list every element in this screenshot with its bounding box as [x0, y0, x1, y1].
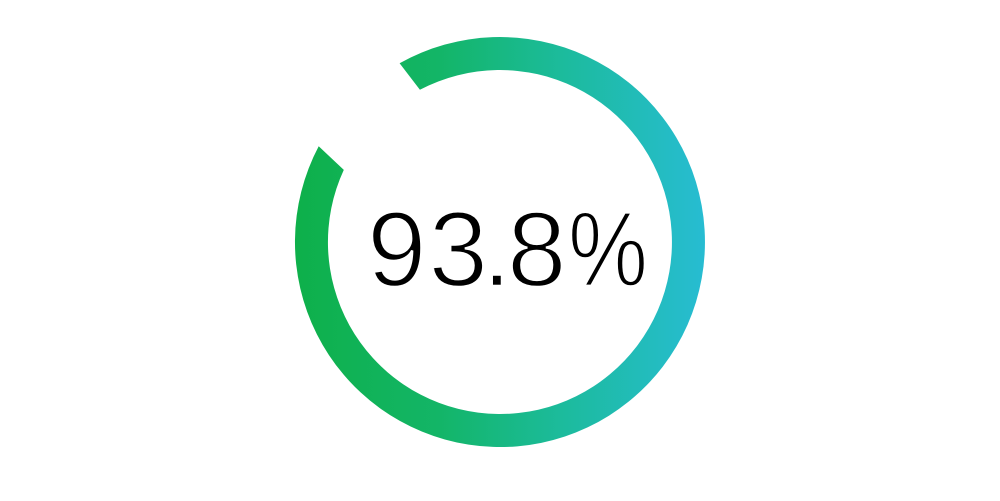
- percentage value: %: [568, 190, 648, 309]
- percentage value: 93.8: [367, 189, 567, 309]
- donut ring: 93.8%: [295, 37, 705, 447]
